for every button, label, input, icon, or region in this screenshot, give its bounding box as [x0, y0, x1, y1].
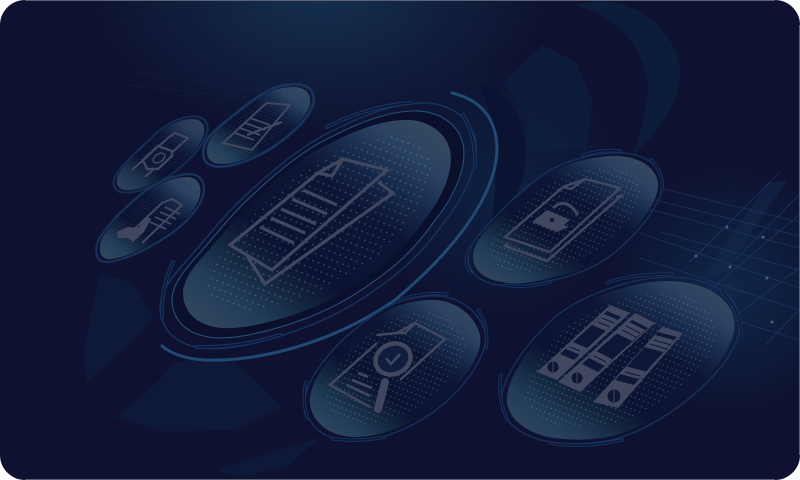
- binder one: [537, 305, 630, 380]
- icon: three binders: [537, 305, 683, 408]
- binder three: [593, 327, 683, 408]
- main disc dark halo: [394, 112, 464, 248]
- icon: document with pencil: [223, 103, 290, 150]
- binder two: [558, 313, 655, 392]
- disc: binders: [500, 274, 741, 445]
- main disc surface: [183, 120, 451, 328]
- disc: magnified document: [304, 294, 487, 441]
- lock disc rings: [466, 150, 663, 287]
- small disc: document with gear: [114, 116, 208, 193]
- magnifier disc rings: [304, 294, 487, 441]
- icon: document with gear: [132, 133, 188, 177]
- background grid: right side: [640, 172, 799, 345]
- icon: locked document: [505, 179, 621, 261]
- binder disc rings: [500, 274, 741, 445]
- icon: stacked document: [230, 159, 393, 284]
- disc: locked document: [466, 150, 663, 287]
- small disc: document with stamp: [96, 174, 204, 262]
- swirl shapes: lower left: [83, 273, 320, 478]
- main disc dotted rows: [206, 136, 431, 311]
- swirl shapes: upper right: [492, 1, 680, 224]
- main disc rings: [160, 93, 497, 360]
- background grid: upper left dashes: [128, 72, 262, 98]
- icon: document with stamp: [117, 199, 182, 243]
- main disc: document: [160, 93, 497, 360]
- icon: document under magnifier: [330, 323, 445, 409]
- small disc: document with pencil: [203, 84, 314, 167]
